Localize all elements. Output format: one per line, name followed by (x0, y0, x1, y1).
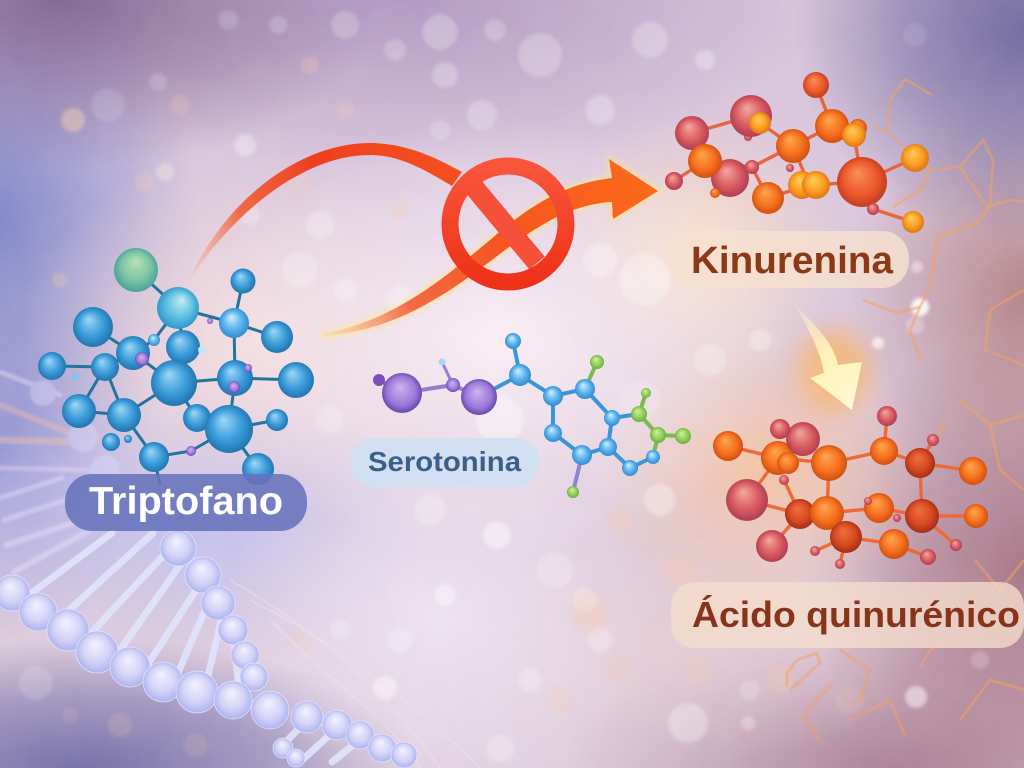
DNA double helix (0, 372, 417, 768)
Triptofano atoms (38, 248, 314, 485)
Ácido quinurénico atoms (713, 406, 988, 569)
arrow: main pathway to Kinurenina (322, 159, 658, 336)
arrow glow: yellow arrow halo (799, 328, 871, 412)
label: Kinurenina: Kinurenina (691, 240, 894, 282)
Serotonina atoms (373, 333, 691, 498)
molecule: Kinurenina (665, 72, 929, 233)
label: Ácido quinurénico (671, 582, 1024, 648)
background: faint curved light threads (230, 580, 480, 768)
arrow glow (322, 159, 658, 336)
DNA faded upper rungs (0, 372, 120, 572)
molecule: Triptofano (38, 248, 314, 485)
DNA front strand beads (0, 575, 417, 768)
molecule: Ácido quinurénico (713, 406, 988, 569)
molecule: Serotonina (373, 333, 691, 498)
DNA rungs (33, 533, 362, 762)
label: Ácido quinurénico: Ácido quinurénico (692, 594, 1020, 635)
icon: prohibition sign (450, 166, 566, 282)
Triptofano bonds (52, 270, 296, 485)
Serotonina bonds (379, 341, 683, 492)
background: orange energy filaments (787, 79, 1024, 740)
label: Serotonina (350, 438, 540, 487)
DNA back strand beads (160, 530, 305, 767)
label: Triptofano (65, 474, 307, 531)
arrow: Kinurenina to Ácido quinurénico (795, 305, 862, 410)
Kinurenina bonds (674, 85, 915, 222)
label: Serotonina: Serotonina (368, 446, 521, 477)
label: Kinurenina (667, 231, 909, 288)
label: Triptofano: Triptofano (89, 480, 283, 523)
arrow: blocked upper curve from Triptofano (188, 143, 462, 282)
Kinurenina atoms (665, 72, 929, 233)
Ácido quinurénico bonds (728, 416, 976, 564)
